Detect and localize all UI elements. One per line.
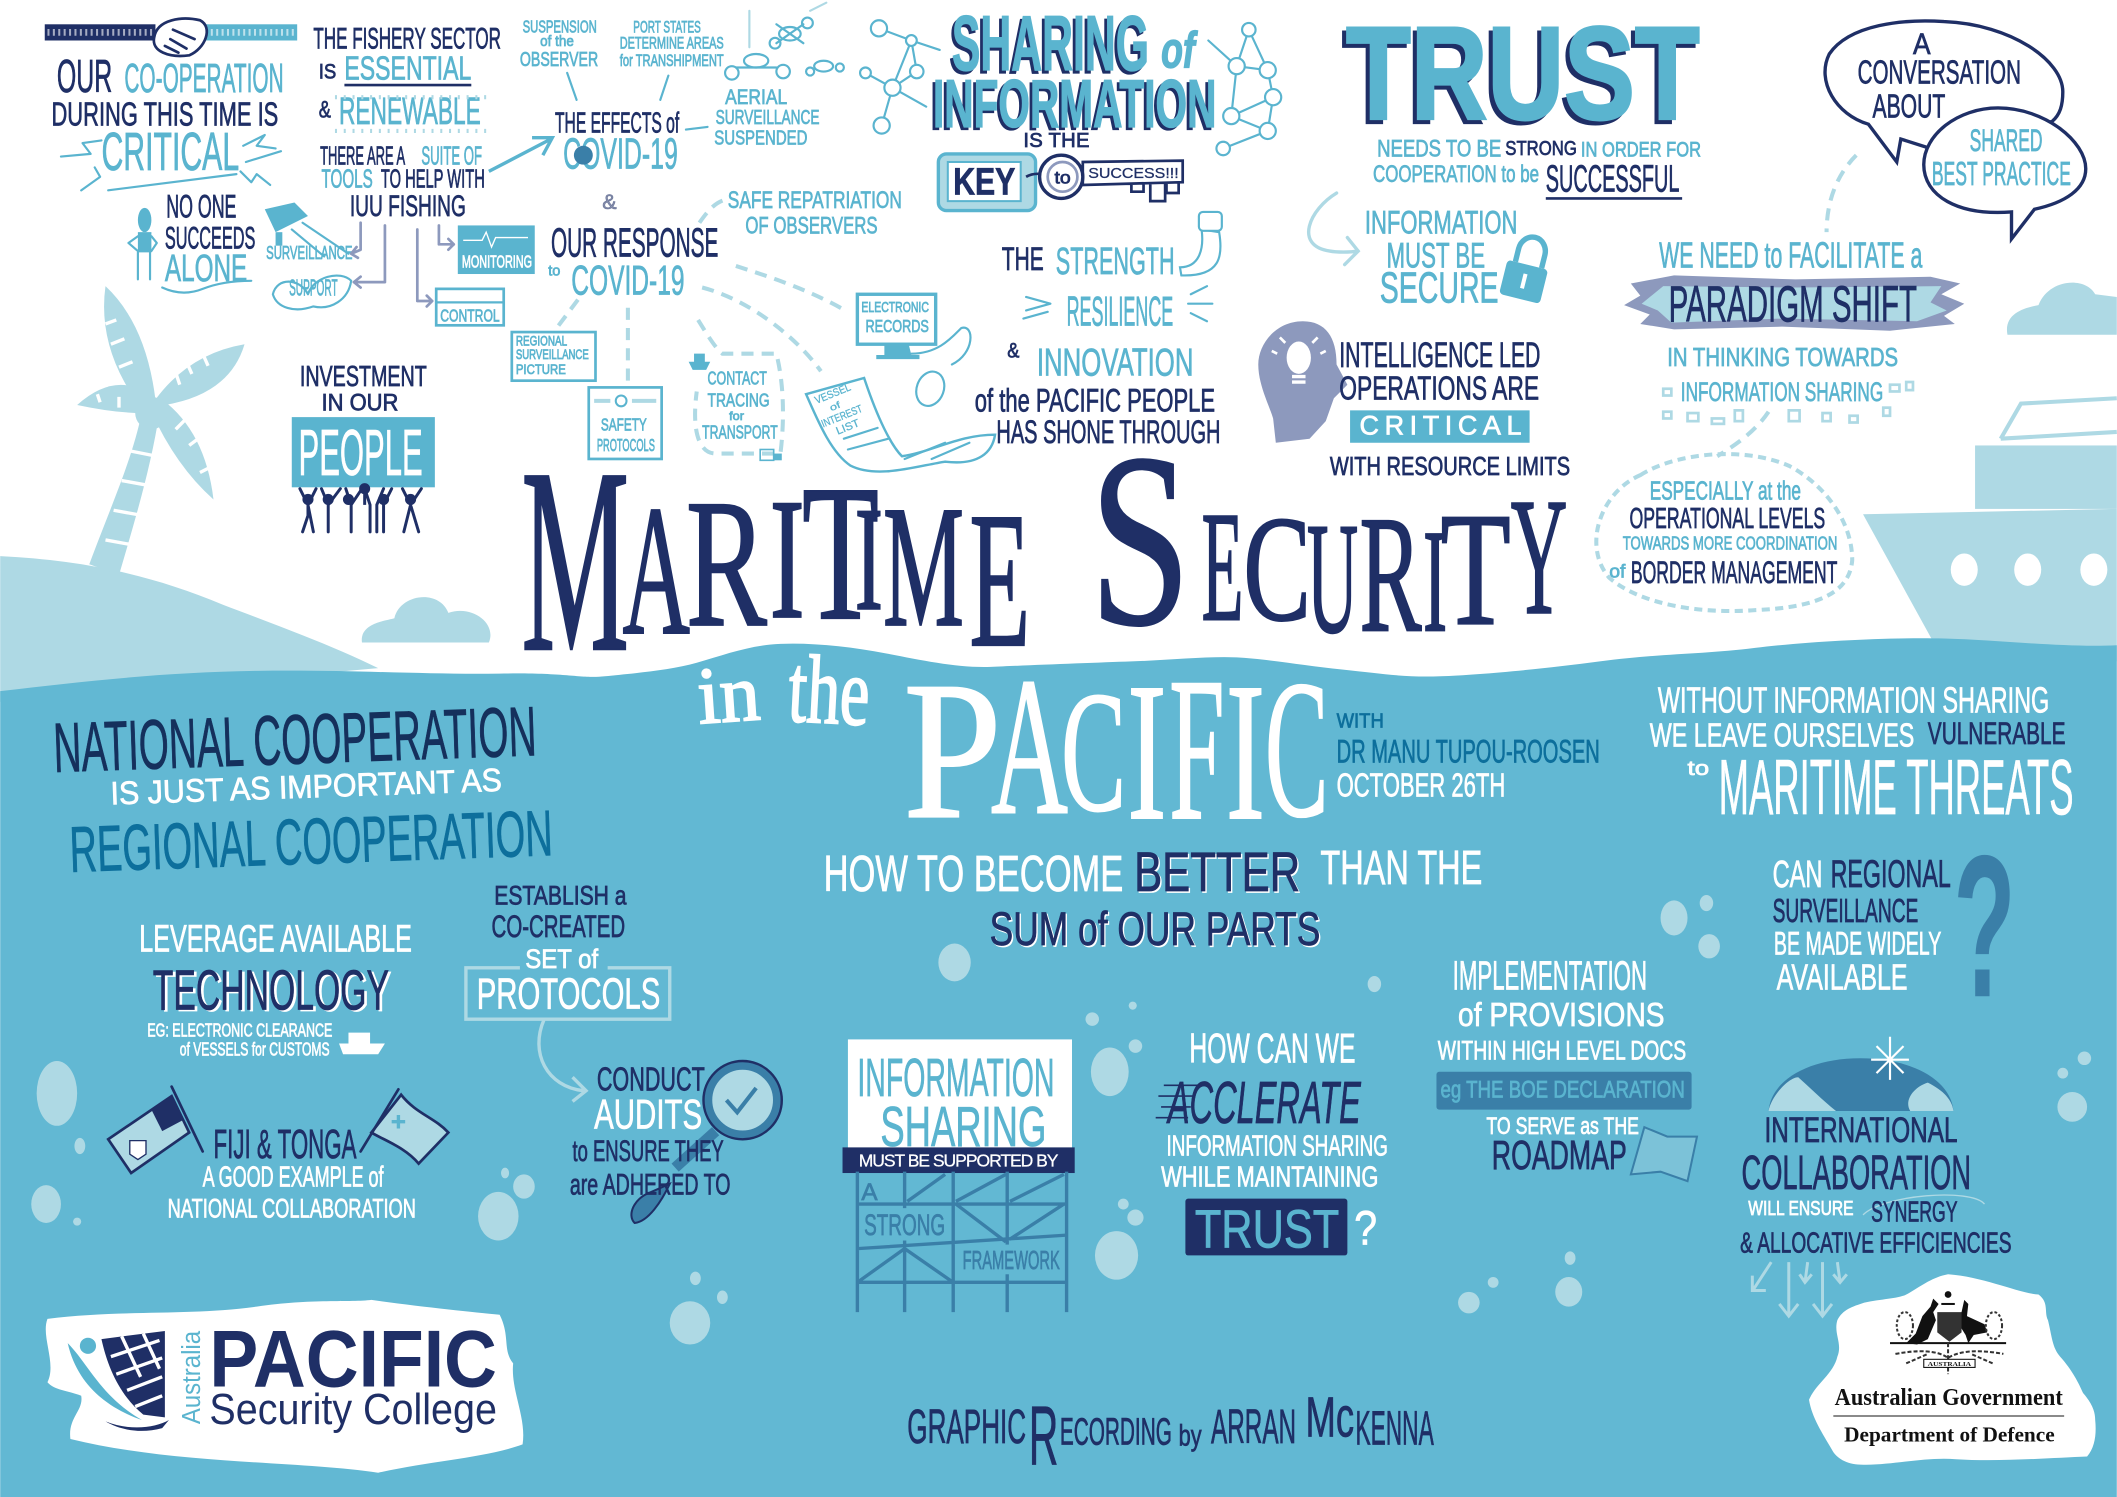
logo: Australian Government: AUSTRALIA [1928,1361,1971,1368]
strength resilience innovation: STRENGTH [1056,241,1175,283]
text: no one succeeds alone [162,188,255,293]
speech bubble: best practice: SHARED [1970,123,2043,158]
heading: sharing of information: of [1161,21,1198,78]
credit: graphic recording: R [1029,1389,1058,1483]
leverage technology [139,919,412,1061]
icon: support hands: SUPPORT [289,275,338,301]
leverage technology: EG: ELECTRONIC CLEARANCE [147,1021,332,1042]
our response [548,219,718,303]
establish protocols: CO-CREATED [492,909,625,944]
implementation of provisions: ROADMAP [1492,1132,1627,1178]
effects of covid: COVID-19 [563,131,678,179]
text: needs to be strong: COOPERATION to be [1373,161,1539,188]
icon: key to success [938,154,1183,211]
subtitle: better than sum of parts: THAN THE [1320,841,1482,895]
dashed blob: border management: ESPECIALLY at the [1650,477,1801,505]
paradigm shift: IN THINKING TOWARDS [1667,344,1898,372]
how can we accelerate: ACCLERATE [1166,1069,1362,1136]
title: Maritime Security: E [1202,480,1243,655]
title: in the [694,635,873,747]
text: no one succeeds alone: SUCCEEDS [165,220,255,255]
flags text: NATIONAL COLLABORATION [168,1194,416,1224]
text: fishery sector: SUITE OF [421,143,482,171]
heading: trust: TRUST [1342,4,1696,152]
contact tracing: TRANSPORT [702,423,778,444]
international collaboration: SYNERGY [1871,1197,1958,1229]
dashed connector to bubble [1827,155,1856,232]
our response: COVID-19 [571,256,685,303]
credit: graphic recording: by [1179,1420,1202,1453]
implementation of provisions: TO SERVE as THE [1486,1113,1639,1140]
dashed blob: border management: of [1609,562,1626,583]
monitoring panel: MONITORING [462,251,532,271]
safe repatriation [728,187,902,240]
contact tracing: for [729,409,744,423]
intelligence led operations: INTELLIGENCE LED [1339,336,1540,375]
icon: padlock [1499,232,1555,304]
text: fishery sector: THE FISHERY SECTOR [313,23,501,56]
paradigm shift [1624,234,1964,456]
information must be secure: MUST BE [1387,236,1485,275]
title: Maritime Security: T [1441,481,1511,660]
strength resilience innovation: THE [1002,241,1044,277]
scroll: vessel of interest list: VESSEL [813,382,853,407]
text: aerial surveillance [714,84,820,149]
intelligence led operations: OPERATIONS ARE [1339,370,1539,408]
dashed blob: border management: TOWARDS MORE COORDINATION [1623,533,1837,554]
control panel: CONTROL [440,305,500,325]
top small notes: OBSERVER [520,49,598,71]
title: Maritime Security [521,403,1567,707]
text: KENNA [1355,1401,1434,1455]
text: needs to be strong: IN ORDER FOR [1581,137,1701,162]
can regional surveillance: CAN [1773,854,1823,896]
credit: graphic recording: GRAPHIC [907,1400,1026,1454]
regional surveillance picture box: SURVEILLANCE [516,347,589,362]
information sharing panel: MUST BE SUPPORTED BY [859,1150,1059,1170]
scaffold framework: STRONG [864,1209,945,1242]
title: Maritime Security: I [770,464,805,655]
text: fishery sector: TOOLS [321,166,373,194]
can regional surveillance: AVAILABLE [1777,956,1908,997]
title: Maritime Security: E [969,473,1030,688]
safety protocols box: PROTOCOLS [597,435,655,455]
heading: cooperation critical: CO-OPERATION [124,55,284,101]
logo: Pacific Security College [46,1300,523,1473]
regional surveillance picture box: PICTURE [516,362,566,377]
information sharing panel [843,1039,1075,1173]
investment in our people: IN OUR [321,389,398,416]
without information sharing [1650,680,2074,831]
credit: graphic recording: Mc [1306,1386,1354,1449]
top small notes: PORT STATES [633,18,701,36]
information sharing panel: SHARING [880,1096,1046,1159]
text: needs to be strong: STRONG [1505,138,1577,160]
icon: small ship [339,1033,385,1054]
logo: Australian Government [1809,1274,2096,1465]
leverage technology: LEVERAGE AVAILABLE [139,919,412,961]
icon: support hands [273,275,351,309]
top small notes: SUSPENSION [523,16,597,36]
conduct audits: CONDUCT [597,1061,705,1099]
investment in our people [292,361,435,489]
presenter and date: WITH [1337,711,1384,733]
title: Maritime Security: R [686,461,767,665]
handshake bar [45,19,297,56]
dashed blob: border management: BORDER MANAGEMENT [1631,555,1837,590]
international collaboration: INTERNATIONAL [1764,1111,1958,1150]
safety protocols box: SAFETY [601,415,647,435]
safety protocols box [589,387,662,459]
text: needs to be strong [1373,136,1701,201]
title: Maritime Security: R [1360,482,1422,667]
information must be secure: INFORMATION [1365,205,1517,241]
implementation of provisions: eg THE BOE DECLARATION [1441,1076,1685,1103]
ampersand connector: & [602,189,617,214]
title: Maritime Security: A [622,468,690,674]
establish protocols: PROTOCOLS [477,970,660,1018]
our response: OUR RESPONSE [551,219,718,265]
strength resilience innovation: INNOVATION [1037,341,1193,384]
how can we accelerate: INFORMATION SHARING [1166,1130,1388,1162]
scaffold framework: FRAMEWORK [963,1247,1060,1275]
top small notes: of the [540,34,574,50]
establish protocols [466,880,670,1019]
national cooperation [52,691,554,886]
international collaboration: WILL ENSURE [1748,1198,1854,1220]
sea background [0,638,2117,1497]
icon: network left [860,20,940,134]
heading: cooperation critical: OUR [57,50,112,102]
national cooperation: REGIONAL COOPERATION [68,796,554,886]
title: Pacific: P [903,641,1002,860]
text: fishery sector: TO HELP WITH [381,166,485,194]
subtitle: better than sum of parts: BETTER [1135,842,1301,904]
implementation of provisions: WITHIN HIGH LEVEL DOCS [1438,1036,1686,1066]
icon: head with lightbulb [1258,321,1347,443]
text: is the: IS THE [1023,130,1090,152]
how can we accelerate: WHILE MAINTAINING [1161,1162,1378,1194]
speech bubble: best practice [1924,108,2086,239]
island hill [0,556,378,702]
how can we accelerate: ? [1354,1202,1377,1256]
icon: roadmap [1631,1127,1697,1181]
can regional surveillance [1773,853,1951,997]
logo: Pacific Security College: Security College [209,1386,497,1434]
text: fishery sector [313,23,501,223]
can regional surveillance: REGIONAL [1831,853,1951,896]
conduct audits: are ADHERED TO [570,1169,730,1202]
text: aerial surveillance: SUSPENDED [714,127,807,149]
without information sharing: to [1688,758,1709,780]
effects of covid [489,107,679,179]
title: Maritime Security: S [1090,403,1191,678]
text: aerial surveillance: SURVEILLANCE [716,107,820,129]
dashed connectors [558,200,845,454]
speech bubble: conversation: ABOUT [1872,87,1945,125]
strength resilience innovation: HAS SHONE THROUGH [996,414,1220,450]
icon: stick figure [128,208,157,279]
safe repatriation: SAFE REPATRIATION [728,187,902,214]
subtitle: better than sum of parts: SUM of OUR PARTS [991,904,1322,957]
can regional surveillance: BE MADE WIDELY [1774,925,1941,961]
credit: graphic recording: ARRAN [1211,1400,1296,1454]
cloud right [2007,283,2117,335]
top small notes [520,16,724,130]
heading: cooperation critical [52,50,284,190]
regional surveillance picture box [512,332,595,381]
logo: Australian Government: Australian Government [1835,1384,2063,1411]
contact tracing: CONTACT [708,369,767,390]
establish protocols: SET of [525,944,599,974]
text: C [1265,639,1328,858]
investment in our people: PEOPLE [299,416,423,489]
title: in the: in [694,647,763,741]
monitoring panel [458,225,535,274]
arrow to audits [539,1019,586,1101]
dashed blob: border management [1596,454,1852,611]
scroll: vessel of interest list: INTEREST [820,403,865,430]
icon: people holding sign [300,485,421,532]
title: Maritime Security: I [1423,499,1447,662]
icon: magnifier with tick [631,1061,782,1223]
national cooperation: NATIONAL COOPERATION [52,691,538,787]
presenter and date [1337,711,1600,804]
cloud left [362,597,490,643]
scroll: vessel of interest list: LIST [834,417,862,438]
intelligence led operations: CRITICAL [1360,411,1522,441]
icon: key to success: to [1054,168,1071,188]
scaffold framework: A [861,1179,878,1206]
paradigm shift: PARADIGM SHIFT [1669,275,1917,332]
icon: globe [1769,1037,1953,1111]
big question mark: ? [1953,813,2016,1039]
international collaboration [1740,1111,2012,1260]
arrows down [1752,1262,1847,1316]
subtitle: better than sum of parts: BETTER [1134,841,1300,903]
presenter and date: OCTOBER 26TH [1337,766,1505,804]
speech bubble: conversation: A [1913,28,1931,61]
logo: Australian Government: Department of Defence [1844,1423,2055,1447]
conduct audits: AUDITS [594,1090,702,1137]
title: Pacific [903,636,1328,863]
control panel [436,289,504,325]
heading: cooperation critical: CRITICAL [101,122,239,182]
our response: to [548,263,560,279]
text: fishery sector: THERE ARE A [320,143,406,171]
text: needs to be strong: NEEDS TO BE [1377,136,1501,163]
intelligence led operations [1330,336,1570,481]
arrow to information secure [1309,193,1358,265]
text: fishery sector: ESSENTIAL [344,50,471,88]
text: needs to be strong: SUCCESSFUL [1546,159,1679,201]
icon: key to success: KEY [953,161,1015,203]
arrows from IUU fishing [351,223,454,306]
presenter and date: DR MANU TUPOU-ROOSEN [1337,734,1600,770]
text: fishery sector: IS [319,58,336,83]
information must be secure [1365,205,1517,312]
title: Maritime Security: M [521,414,629,707]
title: Pacific: C [1061,657,1126,848]
can regional surveillance: SURVEILLANCE [1773,892,1918,930]
electronic records monitor: ELECTRONIC [861,300,929,316]
paradigm shift: INFORMATION SHARING [1681,377,1883,407]
how can we accelerate [1156,1024,1388,1259]
title: in the: the [786,635,873,747]
top small notes: DETERMINE AREAS [620,35,724,53]
flags text [168,1121,416,1224]
effects of covid: THE EFFECTS of [555,107,679,139]
how can we accelerate: HOW CAN WE [1189,1024,1355,1071]
title: Pacific: I [1226,642,1265,861]
strength resilience innovation: RESILIENCE [1067,287,1173,334]
heading: sharing of information: INFORMATION [933,67,1216,142]
subtitle: better than sum of parts: HOW TO BECOME [824,845,1123,902]
contact tracing [689,354,782,460]
leverage technology: of VESSELS for CUSTOMS [180,1040,330,1061]
information must be secure: SECURE [1380,264,1499,312]
information sharing panel: INFORMATION [857,1048,1054,1108]
text: fishery sector: RENEWABLE [339,91,481,133]
text: no one succeeds alone: NO ONE [166,188,236,224]
without information sharing: WE LEAVE OURSELVES [1650,716,1914,754]
icon: drones [725,3,844,80]
heading: trust: TRUST [1346,0,1700,148]
speech bubble: conversation [1825,21,2063,162]
investment in our people: INVESTMENT [300,361,427,393]
title: Pacific: F [1169,636,1225,863]
title: Pacific: A [991,637,1068,856]
text: no one succeeds alone: ALONE [165,248,247,290]
strength resilience innovation [975,212,1222,450]
scroll: vessel of interest list: of [828,400,843,414]
scroll: vessel of interest list [806,378,995,472]
electronic records monitor: RECORDS [865,316,929,336]
establish protocols: ESTABLISH a [494,880,627,910]
icon: Tonga flag [361,1089,448,1164]
credit: graphic recording: ECORDING [1060,1411,1172,1453]
ship [1863,398,2117,661]
heading: sharing of information: SHARING [949,2,1146,90]
implementation of provisions [1436,952,1692,1178]
safe repatriation: OF OBSERVERS [745,213,878,240]
credit: graphic recording [907,1386,1434,1483]
icon: Fiji flag [108,1087,203,1173]
title: Maritime Security: M [883,470,964,663]
national cooperation: IS JUST AS IMPORTANT AS [110,762,502,812]
heading: sharing of information: SHARING [952,0,1149,87]
text: aerial surveillance: AERIAL [725,84,787,109]
scaffold framework [857,1172,1067,1312]
leverage technology: TECHNOLOGY [155,961,392,1024]
intelligence led operations: WITH RESOURCE LIMITS [1330,453,1570,481]
implementation of provisions: IMPLEMENTATION [1453,952,1647,998]
dashed blob: border management: OPERATIONAL LEVELS [1629,503,1825,535]
paradigm shift: WE NEED to FACILITATE a [1659,234,1923,275]
icon: network right [1208,23,1281,155]
flags text: FIJI & TONGA [213,1121,357,1167]
text: fishery sector: & [319,96,331,123]
text: fishery sector: IUU FISHING [350,190,466,223]
flags text: A GOOD EXAMPLE of [203,1162,384,1194]
icon: camera surveillance [265,202,353,264]
electronic records monitor [857,294,970,410]
subtitle: better than sum of parts [824,841,1482,957]
title: Maritime Security: C [1243,485,1311,653]
heading: sharing of information: INFORMATION [930,70,1214,145]
top small notes: for TRANSHIPMENT [620,52,724,70]
strength resilience innovation: & [1007,338,1020,363]
title: Maritime Security: U [1307,491,1358,667]
text: Y [1511,465,1567,650]
bubbles [31,895,2091,1344]
implementation of provisions: of PROVISIONS [1458,996,1665,1034]
title: Maritime Security: T [802,446,879,661]
logo: Pacific Security College: PACIFIC [209,1314,497,1404]
logo: Pacific Security College: Australia [178,1330,206,1424]
regional surveillance picture box: REGIONAL [516,334,568,349]
icon: camera surveillance: SURVEILLANCE [266,243,353,264]
conduct audits: to ENSURE THEY [573,1135,724,1168]
heading: cooperation critical: DURING THIS TIME IS [52,96,278,134]
icon: key to success: SUCCESS!!! [1088,166,1179,182]
strength resilience innovation: of the PACIFIC PEOPLE [975,383,1215,419]
conduct audits [570,1061,730,1202]
subtitle: better than sum of parts: SUM of OUR PARTS [990,903,1320,956]
contact tracing: TRACING [708,390,770,411]
title: Pacific: I [1127,642,1166,861]
title: Maritime Security: I [855,478,883,642]
leverage technology: TECHNOLOGY [153,960,389,1023]
heading: sharing of information [930,0,1216,145]
how can we accelerate: TRUST [1195,1199,1339,1259]
palm tree [77,286,245,575]
